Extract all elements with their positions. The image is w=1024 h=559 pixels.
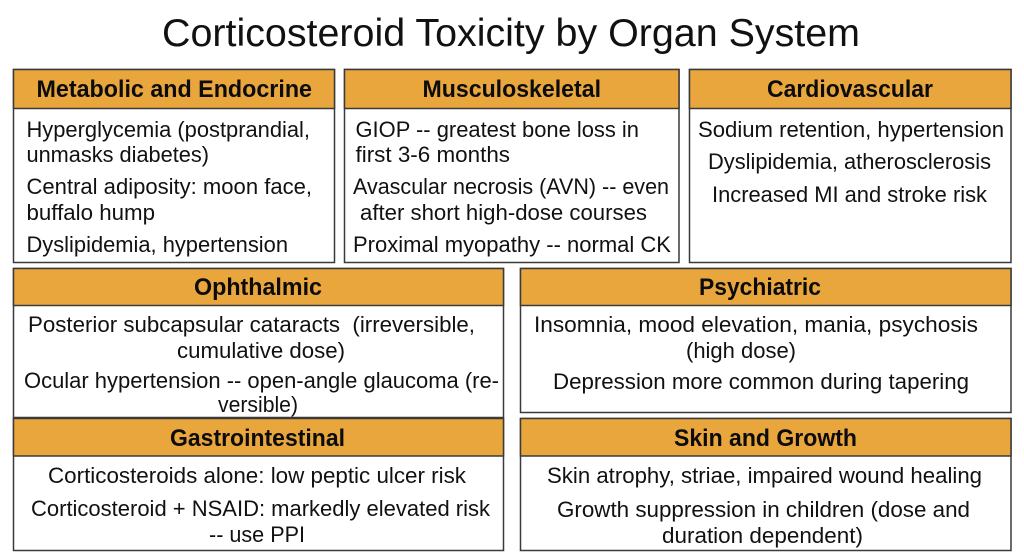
text: metabolic items [26,117,312,257]
text: musculoskeletal items: Proximal myopathy -- normal CK [353,232,671,257]
text: psychiatric items: Insomnia, mood elevation, mania, psychosis [534,312,978,337]
text: musculoskeletal items: Avascular necrosis (AVN) -- even [353,174,669,199]
text: gastrointestinal items: -- use PPI [209,522,305,547]
header: skin and growth [520,418,1011,456]
text: musculoskeletal items: GIOP -- greatest bone loss in [356,117,639,142]
text: ophthalmic items: Ocular hypertension -- open-angle glaucoma (re- [24,368,499,393]
text: musculoskeletal items: first 3-6 months [356,142,510,167]
panel: cardiovascular [690,70,1011,262]
header: ophthalmic: Ophthalmic [194,275,322,301]
header: cardiovascular: Cardiovascular [767,77,933,103]
text: psychiatric items: (high dose) [686,338,796,363]
header: ophthalmic [14,268,504,306]
text: metabolic items: Dyslipidemia, hypertension [26,232,288,257]
text: metabolic items: buffalo hump [26,200,155,225]
header: musculoskeletal: Musculoskeletal [422,77,601,103]
text: musculoskeletal items: after short high-dose courses [360,200,647,225]
panel: psychiatric [520,268,1011,412]
text: gastrointestinal items: Corticosteroid + NSAID: markedly elevated risk [31,496,491,521]
text: metabolic items: Central adiposity: moon face, [26,174,312,199]
text: psychiatric items: Depression more common during tapering [553,369,969,394]
text: psychiatric items [534,312,978,394]
text: skin and growth items: duration dependent) [662,523,863,548]
text: gastrointestinal items: Corticosteroids alone: low peptic ulcer risk [48,463,467,488]
text: skin and growth items [547,463,982,548]
header: skin and growth: Skin and Growth [674,426,857,452]
panel: ophthalmic [14,268,504,418]
header: metabolic and endocrine [14,70,334,108]
text: cardiovascular items [698,117,1004,207]
panel: metabolic and endocrine [14,70,334,262]
text: ophthalmic items: Posterior subcapsular cataracts (irreversible, [28,312,475,337]
panel: skin and growth [520,418,1011,550]
panel: musculoskeletal [344,70,679,262]
header: metabolic and endocrine: Metabolic and Endocrine [36,77,312,103]
text: cardiovascular items: Sodium retention, hypertension [698,117,1004,142]
header: psychiatric [520,268,1011,306]
text: ophthalmic items: versible) [218,392,298,417]
text: gastrointestinal items [31,463,491,547]
text: skin and growth items: Growth suppression in children (dose and [557,497,970,522]
text: metabolic items: unmasks diabetes) [26,142,209,167]
header: cardiovascular [690,70,1011,108]
header: gastrointestinal [14,418,504,456]
text: cardiovascular items: Increased MI and stroke risk [712,182,988,207]
text: ophthalmic items: cumulative dose) [177,338,345,363]
text: ophthalmic items [24,312,499,417]
header: gastrointestinal: Gastrointestinal [170,426,345,452]
title: Corticosteroid Toxicity by Organ System [162,12,860,55]
panel: gastrointestinal [14,418,504,550]
header: musculoskeletal [344,70,679,108]
header: psychiatric: Psychiatric [699,275,821,301]
text: musculoskeletal items [353,117,671,257]
text: metabolic items: Hyperglycemia (postprandial, [26,117,310,142]
text: cardiovascular items: Dyslipidemia, atherosclerosis [708,149,991,174]
text: skin and growth items: Skin atrophy, striae, impaired wound healing [547,463,982,488]
